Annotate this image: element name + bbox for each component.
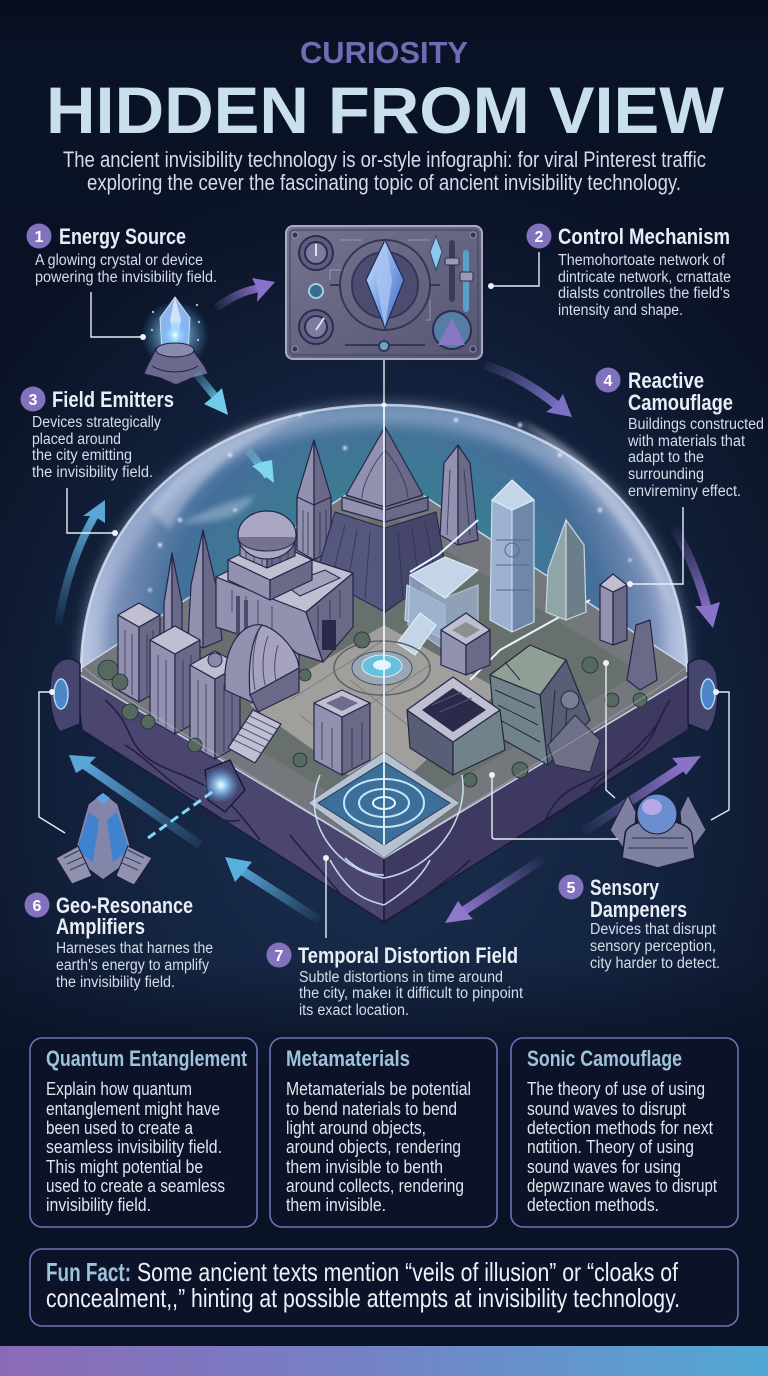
card: metamaterials: Metamaterials be potential: [286, 1079, 471, 1099]
dome milky inner rim: [90, 414, 678, 670]
card: quantum entanglement: invisibility field.: [46, 1195, 151, 1215]
callout 7: temporal distortion field: the city, makeı it difficult to pinpoint: [299, 985, 524, 1002]
card: metamaterials: around collects, rendering: [286, 1176, 464, 1196]
arrow: into dome: [248, 450, 274, 483]
card: sonic camouflage: depwzınare waves to disrupt: [527, 1176, 717, 1196]
distortion field outline: [314, 775, 463, 905]
open roof building: [407, 677, 505, 775]
callout 4: reactive camouflage: envireminy effect.: [628, 483, 741, 500]
dashed resonance beam: [148, 790, 215, 838]
callout 4: reactive camouflage: adapt to the: [628, 449, 704, 466]
callout 1: energy source: A glowing crystal or device: [35, 252, 203, 269]
fun fact box: Fun Fact:: [46, 1257, 131, 1287]
callout 5: sensory dampeners: Dampeners: [590, 897, 687, 922]
callout 3: field emitters: the invisibility field.: [32, 464, 153, 481]
central energy beam: [383, 405, 385, 845]
arrow: right arc: [674, 527, 720, 628]
temporal water pit: [308, 752, 460, 858]
emitter: right node: [688, 659, 718, 732]
illustration: domed city: [50, 405, 718, 922]
arrow: bottom blue: [225, 857, 319, 920]
card: sonic camouflage: Sonic Camouflage: [527, 1046, 682, 1071]
callout 2: control mechanism: dintricate network, crnattate: [558, 269, 731, 286]
eyebrow: curiosity: CURIOSITY: [300, 35, 468, 70]
card: metamaterials: light around objects,: [286, 1118, 426, 1138]
central pyramid temple: [316, 427, 446, 612]
callout 4: reactive camouflage: with materials that: [627, 433, 746, 450]
callout 1: energy source: powering the invisibility field.: [35, 269, 217, 286]
card: sonic camouflage: sound waves to disrupt: [527, 1099, 686, 1119]
stairs: [228, 710, 281, 763]
callout 6: geo-resonance amplifiers: Geo-Resonance: [56, 893, 193, 918]
domed main building: [216, 511, 353, 662]
title: HIDDEN FROM VIEW: [46, 73, 725, 147]
callout 5: sensory dampeners: city harder to detect.: [590, 955, 720, 972]
front tower: [314, 690, 370, 775]
card: metamaterials: around objects, rendering: [286, 1137, 461, 1157]
panel screws and traces: [292, 232, 476, 352]
mossy stone building: [490, 645, 600, 772]
plaza energy circle: [334, 641, 430, 695]
back obelisk: [440, 445, 478, 545]
leader dots: [49, 283, 719, 861]
platform side walls: [75, 672, 695, 922]
callout 4: reactive camouflage: Camouflage: [628, 390, 733, 415]
callout 2: control mechanism: Themohortoate network of: [558, 252, 726, 269]
arrow: bottom purple: [445, 858, 544, 923]
callout 6: geo-resonance amplifiers: [24, 892, 213, 991]
callout 3: field emitters: the city emitting: [32, 447, 132, 464]
energy crystal device: [141, 297, 209, 385]
arrow: crystal to panel: [216, 278, 275, 308]
callout 6: geo-resonance amplifiers: 6: [33, 898, 42, 915]
callout 5: sensory dampeners: 5: [567, 880, 576, 897]
callout 5: sensory dampeners: Devices that disrupt: [590, 921, 717, 938]
card: sonic camouflage: The theory of use of using: [527, 1079, 705, 1099]
emitter: left node: [50, 659, 80, 732]
bottom gradient bar: [0, 1346, 768, 1376]
callout 7: temporal distortion field: Temporal Distortion Field: [298, 943, 518, 968]
callout 4: reactive camouflage: Reactive: [628, 368, 704, 393]
callout 5: sensory dampeners: Sensory: [590, 875, 660, 900]
callout 6: geo-resonance amplifiers: Amplifiers: [56, 914, 145, 939]
panel central ring: [330, 240, 440, 351]
central connector line top: [383, 358, 385, 405]
callout 4: reactive camouflage: surrounding: [628, 466, 704, 483]
sliders: [445, 240, 473, 312]
dome outline: [81, 405, 687, 672]
front left towers: [118, 603, 240, 759]
card: quantum entanglement: Explain how quantum: [46, 1079, 192, 1099]
bushes: [98, 632, 647, 787]
card: sonic camouflage: nɑtition. Theory of using: [527, 1137, 694, 1157]
card: sonic camouflage: detection methods.: [527, 1195, 659, 1215]
arrow: right lower: [583, 756, 701, 832]
subtitle: [63, 147, 706, 195]
stars in dome: [148, 413, 632, 592]
callout 2: control mechanism: 2: [535, 229, 544, 246]
stone monolith and tower: [546, 520, 657, 690]
callout 1: energy source: 1: [35, 229, 44, 246]
glass stairs and small building: [397, 613, 490, 675]
left city: back towers and spires: [164, 440, 331, 655]
sensory dampener device: [610, 794, 706, 868]
callout 4: reactive camouflage: 4: [604, 373, 613, 390]
callout 2: control mechanism: dialsts controlles the field's: [558, 285, 730, 302]
dome sheen streaks: [150, 410, 672, 610]
card: metamaterials: Metamaterials: [286, 1046, 410, 1071]
callout 3: field emitters: placed around: [32, 431, 121, 448]
right city: glass tower and glass building: [405, 480, 590, 680]
callout 7: temporal distortion field: [266, 942, 524, 1019]
arrow: left arc: [58, 500, 105, 625]
callout 5: sensory dampeners: sensory perception,: [590, 938, 716, 955]
callout 2: control mechanism: [526, 224, 731, 319]
arrow: crystal to dome: [196, 373, 228, 415]
callout 3: field emitters: Field Emitters: [52, 387, 174, 412]
panel dials: [299, 236, 333, 344]
card: quantum entanglement: used to create a seamless: [46, 1176, 225, 1196]
callout 2: control mechanism: intensity and shape.: [558, 302, 683, 319]
callout 3: field emitters: [20, 386, 174, 481]
callout 1: energy source: [26, 224, 217, 286]
small crystal: [430, 236, 442, 270]
callout 3: field emitters: Devices strategically: [32, 414, 161, 431]
emitter: front node: [203, 760, 245, 812]
card: sonic camouflage: detection methods for next: [527, 1118, 713, 1138]
gauge: [433, 311, 471, 349]
card: metamaterials: them invisible.: [286, 1195, 386, 1215]
arrow: lower left: [69, 755, 200, 845]
arrow: panel to camouflage: [485, 365, 572, 417]
card: sonic camouflage: [511, 1038, 738, 1227]
card: metamaterials: them invisible to benth: [286, 1157, 443, 1177]
leader lines: [39, 252, 729, 938]
callout 7: temporal distortion field: Subtle distortions in time around: [299, 969, 503, 986]
control panel: [286, 226, 482, 359]
arched hall: [225, 625, 299, 712]
card: metamaterials: to bend naterials to bend: [286, 1099, 457, 1119]
card: metamaterials: [270, 1038, 497, 1227]
card: quantum entanglement: seamless invisibility field.: [46, 1137, 222, 1157]
callout 2: control mechanism: Control Mechanism: [558, 224, 730, 249]
callout 1: energy source: Energy Source: [59, 224, 186, 249]
card: quantum entanglement: been used to create a: [46, 1118, 194, 1138]
card: quantum entanglement: This might potential be: [46, 1157, 203, 1177]
glass dome: [81, 405, 687, 858]
card: quantum entanglement: [30, 1038, 257, 1227]
callout 7: temporal distortion field: its exact location.: [299, 1002, 409, 1019]
callout 7: temporal distortion field: 7: [275, 948, 284, 965]
geo-resonance amplifier device: [56, 792, 152, 885]
callout 5: sensory dampeners: [558, 874, 720, 972]
callout 6: geo-resonance amplifiers: earth's energy to amplify: [56, 957, 209, 974]
callout 4: reactive camouflage: [596, 368, 764, 500]
card: quantum entanglement: entanglement might have: [46, 1099, 220, 1119]
fun fact box: [30, 1249, 738, 1326]
callout 6: geo-resonance amplifiers: Harneses that harnes the: [56, 940, 213, 957]
card: quantum entanglement: Quantum Entanglement: [46, 1046, 248, 1071]
panel crystal: [366, 240, 404, 328]
callout 3: field emitters: 3: [29, 392, 38, 409]
callout 6: geo-resonance amplifiers: the invisibility field.: [56, 974, 175, 991]
card: sonic camouflage: sound waves for using: [527, 1157, 681, 1177]
platform surface: [75, 470, 695, 858]
